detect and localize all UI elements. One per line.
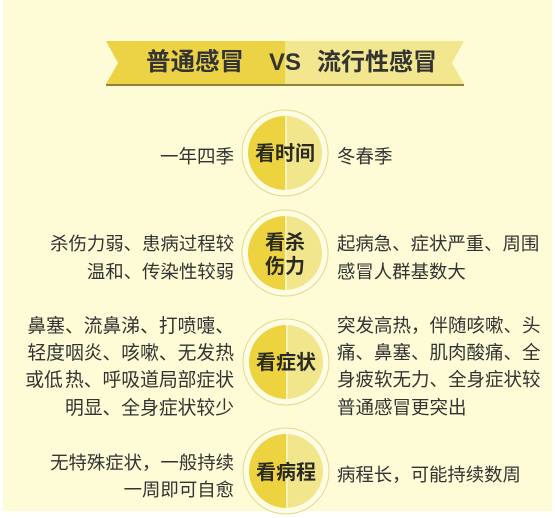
row 3 left text (25, 315, 234, 418)
row 1 left text: 一年四季 (160, 146, 234, 167)
row 3 right text (337, 315, 541, 418)
row 3 left text: 或低 热、呼吸道局部症状 (25, 369, 234, 390)
row 2 right text (337, 233, 539, 282)
row 3 right text: 突发高热，伴随咳嗽、头 (337, 315, 541, 336)
label: 看杀伤力 (265, 232, 305, 278)
title: VS: VS (269, 49, 301, 76)
row 3 left text: 轻度咽炎、咳嗽、无发热 (27, 342, 234, 363)
row 3 left text: 明显、全身症状较少 (65, 397, 234, 418)
circle: 看症状 (243, 319, 329, 405)
circle: 看病程 (243, 428, 329, 514)
row 4 left text (50, 452, 234, 500)
label: 看时间: 看时间 (255, 143, 315, 165)
row 2 right text: 感冒人群基数大 (337, 261, 466, 282)
title ribbon (106, 41, 464, 86)
row 3 right text: 痛、鼻塞、肌肉酸痛、全 (337, 342, 541, 363)
row 2 left text (50, 233, 234, 282)
title: left: 普通感冒 (146, 49, 244, 76)
label: 看症状: 看症状 (256, 352, 316, 374)
row 4 left text: 一周即可自愈 (124, 479, 234, 500)
label: 看杀伤力: 伤力 (265, 256, 305, 278)
label: 看杀伤力: 看杀 (265, 232, 305, 254)
label: 看病程: 看病程 (256, 462, 316, 484)
row 1 right text: 冬春季 (337, 146, 393, 167)
row 2 left text: 温和、传染性较弱 (87, 261, 234, 282)
row 4 right text: 病程长，可能持续数周 (337, 464, 521, 485)
row 3 right text: 身疲软无力、全身症状较 (337, 369, 541, 390)
circle: 看时间 (242, 110, 328, 196)
row 2 left text: 杀伤力弱、患病过程较 (50, 233, 234, 254)
row 2 right text: 起病急、症状严重、周围 (337, 233, 539, 254)
row 3 left text: 鼻塞、流鼻涕、打喷嚏、 (27, 315, 234, 336)
circle: 看杀伤力 (242, 210, 328, 296)
row 4 left text: 无特殊症状，一般持续 (50, 452, 234, 473)
title: right: 流行性感冒 (317, 49, 437, 76)
row 3 right text: 普通感冒更突出 (337, 397, 467, 418)
